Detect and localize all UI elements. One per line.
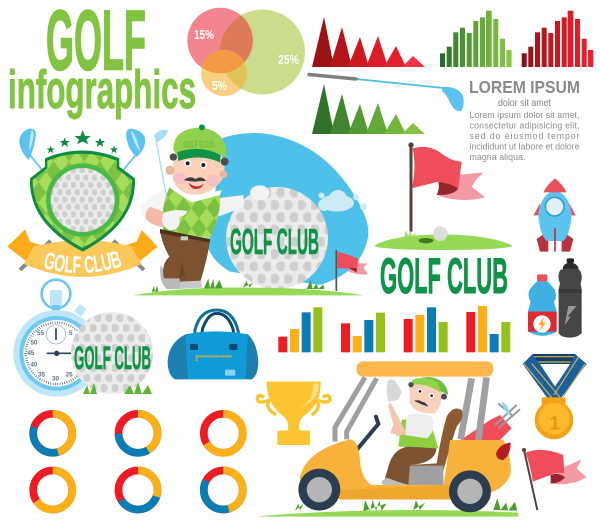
small flag — [336, 250, 368, 291]
ribbon: GOLF CLUB — [44, 252, 122, 273]
crest badge — [7, 128, 158, 277]
donut 4 — [33, 470, 72, 510]
right arm — [217, 195, 244, 217]
stopwatch: 25 — [66, 371, 73, 378]
bar chart 4 — [466, 306, 510, 352]
icon: rocket — [533, 178, 576, 252]
text: GOLF CLUB — [230, 221, 319, 262]
bar charts — [278, 306, 510, 352]
title: infographics — [8, 60, 196, 120]
ground — [260, 510, 518, 517]
green mountain chart — [312, 84, 425, 134]
icon: bottles — [528, 258, 582, 338]
red bar chart — [522, 11, 593, 67]
text block: lorem ipsum: magna aliqua. — [470, 152, 526, 162]
text block: lorem ipsum: dolor sit amet — [498, 97, 551, 109]
golf club held — [154, 130, 169, 212]
donut charts — [33, 414, 243, 510]
donut 2 — [118, 414, 158, 453]
text block: lorem ipsum: incididunt ut labore et dolore — [470, 142, 580, 152]
green bar chart — [440, 11, 512, 67]
venn diagram: 5% — [212, 78, 227, 93]
golf bag in cart — [461, 402, 520, 440]
stopwatch: 50 — [30, 339, 38, 346]
collar — [172, 183, 222, 202]
bar chart 1 — [278, 307, 322, 352]
blue backdrop shape — [208, 133, 368, 285]
text block: lorem ipsum: LOREM IPSUM — [469, 77, 580, 97]
text block: lorem ipsum: Lorem ipsum dolor sit amet, — [470, 110, 580, 120]
wheels — [298, 469, 491, 512]
seat — [408, 408, 463, 477]
big golf ball with text — [226, 187, 328, 289]
flag pole — [406, 145, 415, 232]
stopwatch: 30 — [52, 376, 60, 383]
golf cart — [260, 361, 520, 517]
seat base — [408, 466, 443, 485]
black bottle — [558, 258, 582, 338]
stopwatch: 35 — [38, 371, 46, 378]
roof — [357, 361, 493, 377]
back of flag — [438, 172, 485, 200]
text block: lorem ipsum — [469, 77, 580, 162]
golfer character — [140, 124, 269, 289]
donut 3 — [204, 414, 243, 453]
driver — [381, 377, 448, 485]
tail light — [496, 443, 511, 460]
pillars — [335, 377, 377, 442]
venn diagram: 15% — [194, 27, 214, 42]
left sleeve — [140, 190, 167, 228]
venn diagram: 25% — [278, 52, 299, 67]
moustache and mouth — [189, 183, 204, 189]
bar chart 3 — [404, 307, 448, 352]
stopwatch: 45 — [27, 350, 35, 357]
icon: medal — [523, 354, 587, 439]
text block: lorem ipsum: sed do eiusmod tempor — [470, 131, 580, 141]
shoes — [160, 265, 202, 289]
steering wheel — [357, 417, 378, 450]
flag cloth — [412, 147, 462, 188]
stars — [47, 130, 118, 153]
bar chart 2 — [341, 313, 385, 352]
flag and hole — [374, 142, 513, 250]
flag bottom right — [522, 448, 587, 510]
text block: lorem ipsum: consectetur adipisicing elit, — [470, 120, 580, 130]
donut 5 — [118, 470, 158, 510]
donut 6 — [204, 470, 243, 510]
belt — [160, 229, 210, 242]
cart body — [300, 439, 511, 499]
arm and glove — [146, 207, 170, 227]
blue bottle — [528, 274, 557, 336]
venn diagram — [187, 8, 305, 96]
head — [172, 150, 224, 195]
title — [8, 0, 196, 120]
stopwatch: 40 — [30, 362, 38, 369]
grass strip under golfer — [133, 278, 363, 295]
golfer character: GOLF CLUB — [183, 139, 214, 149]
ribbon — [7, 229, 158, 277]
vest — [162, 188, 220, 238]
crossed clubs — [19, 129, 145, 270]
shield — [30, 150, 135, 252]
cap — [173, 128, 227, 157]
red mountain chart — [312, 17, 425, 67]
text: GOLF CLUB — [74, 340, 151, 376]
icon: golf club — [309, 74, 464, 111]
stopwatch — [13, 280, 100, 397]
stopwatch: 5 — [69, 330, 73, 337]
stopwatch: 55 — [37, 330, 45, 337]
icon: trophy — [257, 382, 330, 445]
small golf ball with text — [71, 312, 153, 394]
icon: duffel bag — [168, 310, 258, 379]
donut 1 — [33, 414, 72, 453]
clouds — [318, 190, 367, 212]
legs — [160, 230, 210, 282]
icon: medal: 1 — [549, 413, 560, 434]
green mound — [374, 234, 513, 250]
